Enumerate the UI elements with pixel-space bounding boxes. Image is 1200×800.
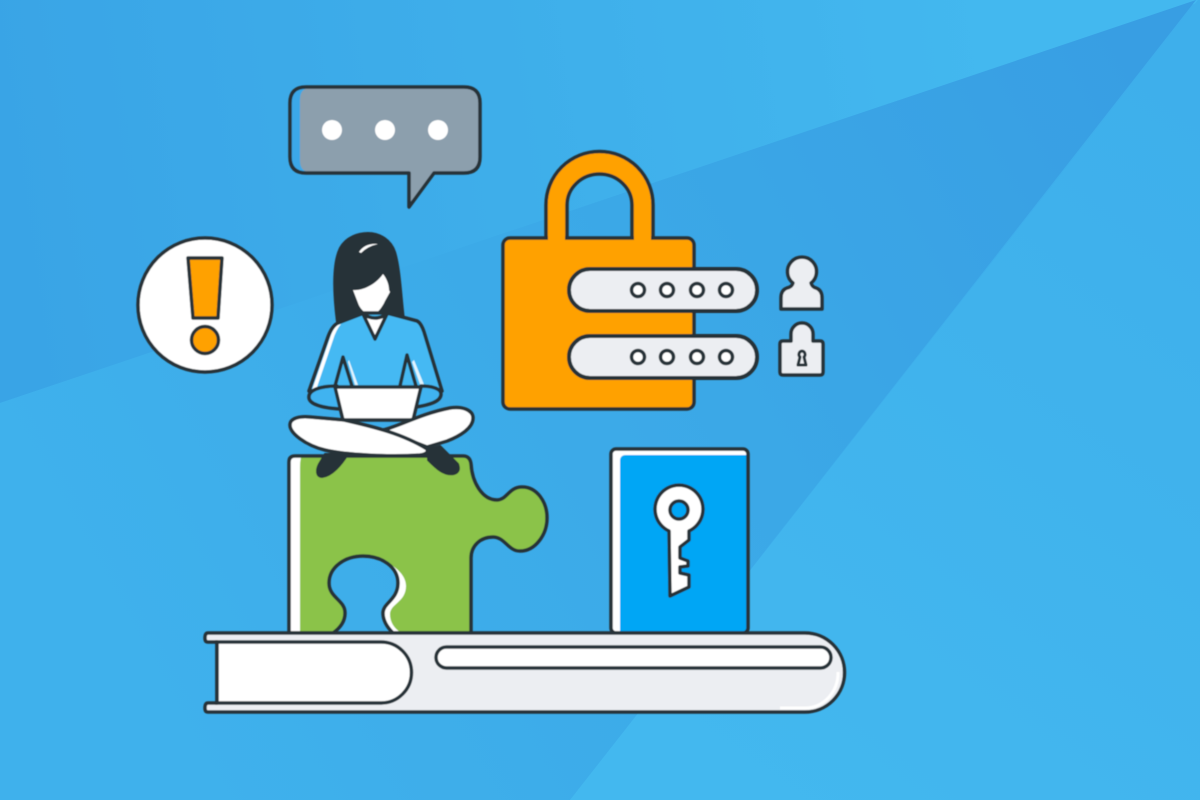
password field two bbox=[569, 336, 757, 378]
shackle joint right bbox=[634, 234, 651, 241]
left leg bbox=[290, 417, 427, 456]
padlock with password fields bbox=[503, 152, 757, 409]
artwork bbox=[138, 87, 844, 712]
neck collar bbox=[363, 314, 387, 339]
left foot bbox=[317, 454, 348, 477]
hair highlight bbox=[359, 244, 378, 253]
lock body bbox=[503, 238, 694, 409]
alert icon bbox=[138, 238, 272, 372]
speech bubble bbox=[290, 87, 480, 207]
hair bbox=[334, 233, 404, 322]
icon: small lock bbox=[780, 323, 823, 375]
right cuff bbox=[416, 386, 441, 407]
key card bbox=[611, 448, 748, 633]
sweater bbox=[309, 313, 442, 391]
icon: key bbox=[655, 485, 703, 596]
arm highlights bbox=[348, 360, 425, 387]
puzzle piece bbox=[289, 456, 547, 633]
left cuff bbox=[309, 386, 341, 409]
right leg bbox=[383, 407, 473, 447]
book pages bbox=[217, 642, 411, 703]
woman with laptop bbox=[290, 233, 473, 477]
book bbox=[205, 633, 844, 712]
password field one bbox=[569, 269, 757, 311]
sleeve highlight bbox=[312, 324, 341, 390]
icon: user bbox=[781, 257, 822, 309]
laptop bbox=[335, 387, 421, 420]
book slot bbox=[436, 647, 831, 668]
right foot bbox=[428, 446, 459, 474]
shackle joint bbox=[548, 234, 565, 241]
speech dots bbox=[322, 120, 448, 140]
face bbox=[353, 274, 390, 315]
book edge highlight bbox=[780, 672, 838, 708]
lock shackle bbox=[546, 152, 653, 240]
arm lines bbox=[335, 355, 416, 386]
